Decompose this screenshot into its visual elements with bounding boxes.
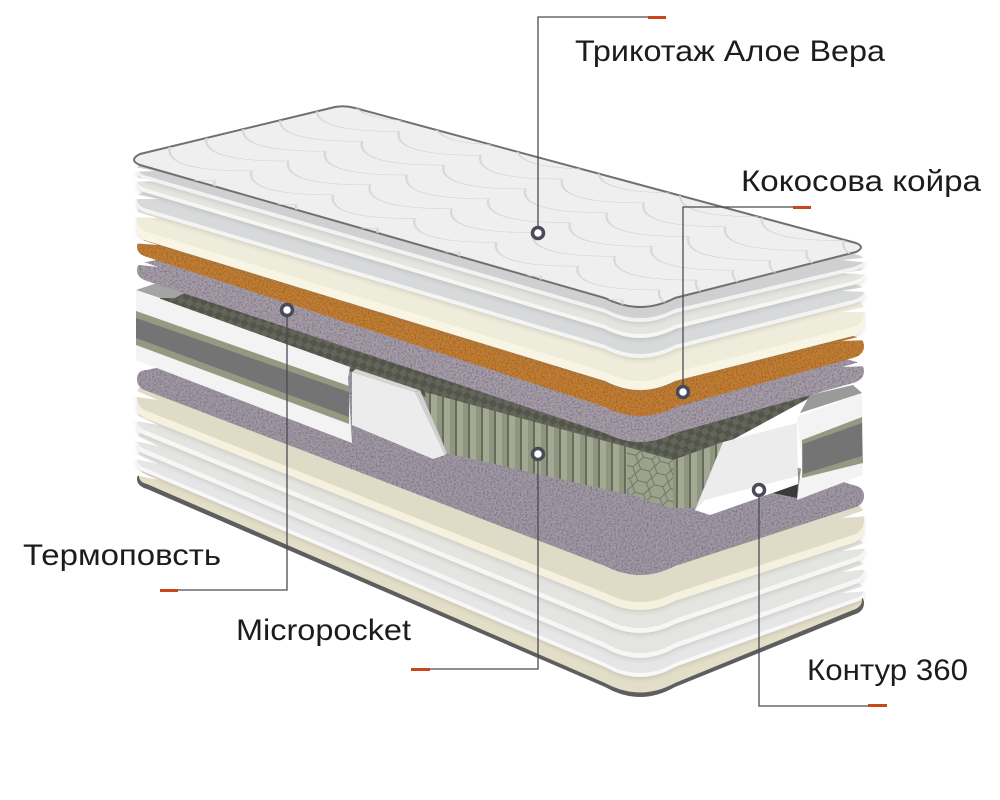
right side panel	[797, 385, 863, 500]
callout: Термоповсть: Термоповсть	[23, 539, 221, 572]
callout: Кокосова койра: Кокосова койра	[741, 165, 981, 198]
panel white cover	[136, 290, 352, 443]
left side panel	[136, 282, 352, 443]
spring block	[160, 260, 815, 508]
panel olive trim	[136, 311, 349, 424]
layer: lower thermo felt	[137, 325, 864, 575]
layer: upper grey foam	[137, 147, 864, 358]
callout: Micropocket: Micropocket	[236, 614, 412, 647]
panel white cover	[797, 393, 863, 500]
callout: Контур 360	[754, 484, 968, 707]
layer: upper white foam b	[137, 129, 864, 338]
layer: lower white foam 2	[137, 387, 864, 658]
spring tops	[160, 260, 815, 462]
layer: bottom cover	[137, 425, 864, 697]
panel grey band	[803, 423, 862, 474]
mattress cross-section illustration	[130, 106, 870, 697]
panel rim	[800, 385, 862, 413]
layer: lower cream latex	[137, 340, 864, 610]
callout: Micropocket	[236, 448, 544, 671]
gaps between layer tips	[130, 166, 870, 593]
callout: Кокосова койра	[678, 165, 981, 398]
layer: aloe vera knit top cover	[134, 106, 861, 307]
layer: lower white foam 1	[137, 367, 864, 633]
callout: Контур 360: Контур 360	[807, 654, 968, 687]
panel rim	[136, 282, 190, 298]
layer: upper cream latex	[137, 160, 864, 390]
spring pockets front face	[425, 392, 627, 494]
layer: upper white foam a	[137, 119, 864, 322]
spring pockets side face	[673, 442, 723, 508]
layer: lower white foam 3	[137, 406, 864, 677]
callout: Термоповсть	[23, 304, 292, 592]
layer: upper thermo felt	[137, 217, 864, 442]
panel olive trim	[802, 417, 863, 478]
dark gap under foam	[773, 484, 798, 498]
layer: coconut coir	[137, 195, 864, 416]
callout: Трикотаж Алое Вера	[532, 16, 885, 238]
foam insert right	[695, 423, 798, 515]
panel grey band	[136, 318, 349, 417]
spring pockets corner face	[627, 447, 673, 508]
foam insert left	[352, 369, 447, 459]
callout: Трикотаж Алое Вера: Трикотаж Алое Вера	[575, 35, 885, 68]
